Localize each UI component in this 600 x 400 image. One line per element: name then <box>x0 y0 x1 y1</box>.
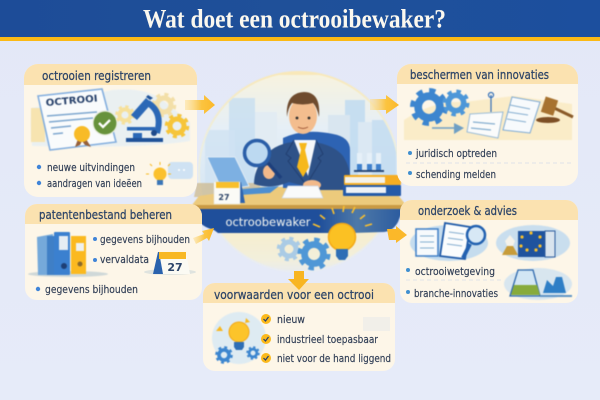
panel: patentenbestand beheren <box>25 204 202 300</box>
icon: calendar <box>214 182 245 204</box>
icon: bulb and speech bubble <box>146 162 193 185</box>
icon: calendar: 27 <box>218 193 230 202</box>
panel: voorwaarden voor een octrooi <box>203 283 395 371</box>
panel: octrooien registreren: neuwe uitvindingen <box>47 162 135 174</box>
seal <box>75 139 91 147</box>
arrow: to onderzoek <box>387 226 407 243</box>
gears <box>413 91 468 123</box>
lower gears <box>278 238 328 268</box>
icon: magnifying glass <box>244 140 281 178</box>
arrow in illustration <box>432 123 464 134</box>
documents and magnifier <box>410 223 488 261</box>
heading: patentenbestand beheren <box>39 207 172 222</box>
panel: onderzoek & advies <box>400 200 578 303</box>
person <box>254 92 351 190</box>
illustration background <box>404 96 572 140</box>
office background <box>200 74 397 187</box>
paper on desk <box>282 186 323 198</box>
arrow: to beschermen <box>370 95 399 114</box>
panel: octrooien registreren: aandragen van ideëen <box>47 178 142 190</box>
panel: patentenbestand beheren: vervaldata <box>100 254 149 266</box>
check list: nieuw <box>277 314 305 326</box>
chair <box>283 132 350 188</box>
central illustration <box>190 71 410 275</box>
arrow: from patentenbestand <box>193 228 214 244</box>
panel: beschermen van innovaties <box>397 64 578 186</box>
lower area <box>222 232 377 269</box>
body <box>254 142 351 190</box>
arrow: to voorwaarden <box>288 271 309 290</box>
certificate: OCTROOI <box>45 93 98 109</box>
desk <box>192 183 406 209</box>
EU patent book <box>496 225 570 261</box>
tie <box>297 143 309 177</box>
panel: onderzoek & advies: octrooiwetgeving <box>415 266 495 278</box>
bullet list <box>406 268 410 272</box>
bullet list <box>93 237 97 241</box>
arrow: to central from registreren <box>185 95 215 114</box>
certificate <box>31 89 117 150</box>
check badge <box>93 111 117 135</box>
panel: patentenbestand beheren: gegevens bijhouden <box>100 234 190 246</box>
heading: beschermen van innovaties <box>410 67 549 82</box>
octroobewaker ribbon <box>193 209 403 233</box>
head <box>289 98 317 134</box>
header banner <box>0 0 600 41</box>
octroobewaker ribbon: octroobewaker <box>226 215 311 229</box>
check list <box>261 314 391 365</box>
heading: voorwaarden voor een octrooi <box>214 287 374 302</box>
icon: calendar: 27 <box>167 261 183 274</box>
test tubes and books <box>343 153 401 196</box>
heading: onderzoek & advies <box>418 203 517 218</box>
bullet list <box>37 165 41 169</box>
panel: patentenbestand beheren: gegevens bijhouden <box>45 284 138 296</box>
laptop <box>207 157 279 195</box>
binders <box>28 232 108 277</box>
documents <box>467 92 540 138</box>
check list: industrieel toepasbaar <box>277 334 379 346</box>
check list: niet voor de hand liggend <box>277 353 391 365</box>
gavel <box>536 97 573 123</box>
icon: microscope <box>126 95 163 142</box>
flask and chart <box>504 268 572 300</box>
icon: light bulb <box>313 206 372 260</box>
title: Wat doet een octrooibewaker? <box>143 4 446 34</box>
bullet list <box>408 151 412 155</box>
hands <box>263 165 275 179</box>
heading: octrooien registreren <box>42 68 151 83</box>
panel: beschermen van innovaties: juridisch optreden <box>415 148 497 160</box>
panel: onderzoek & advies: branche-innovaties <box>414 288 498 300</box>
gears <box>117 94 188 136</box>
illustration <box>212 312 266 364</box>
illustration background <box>31 89 190 147</box>
panel: beschermen van innovaties: schending melden <box>416 169 496 181</box>
icon: calendar <box>144 252 196 275</box>
panel: octrooien registreren <box>24 64 197 197</box>
